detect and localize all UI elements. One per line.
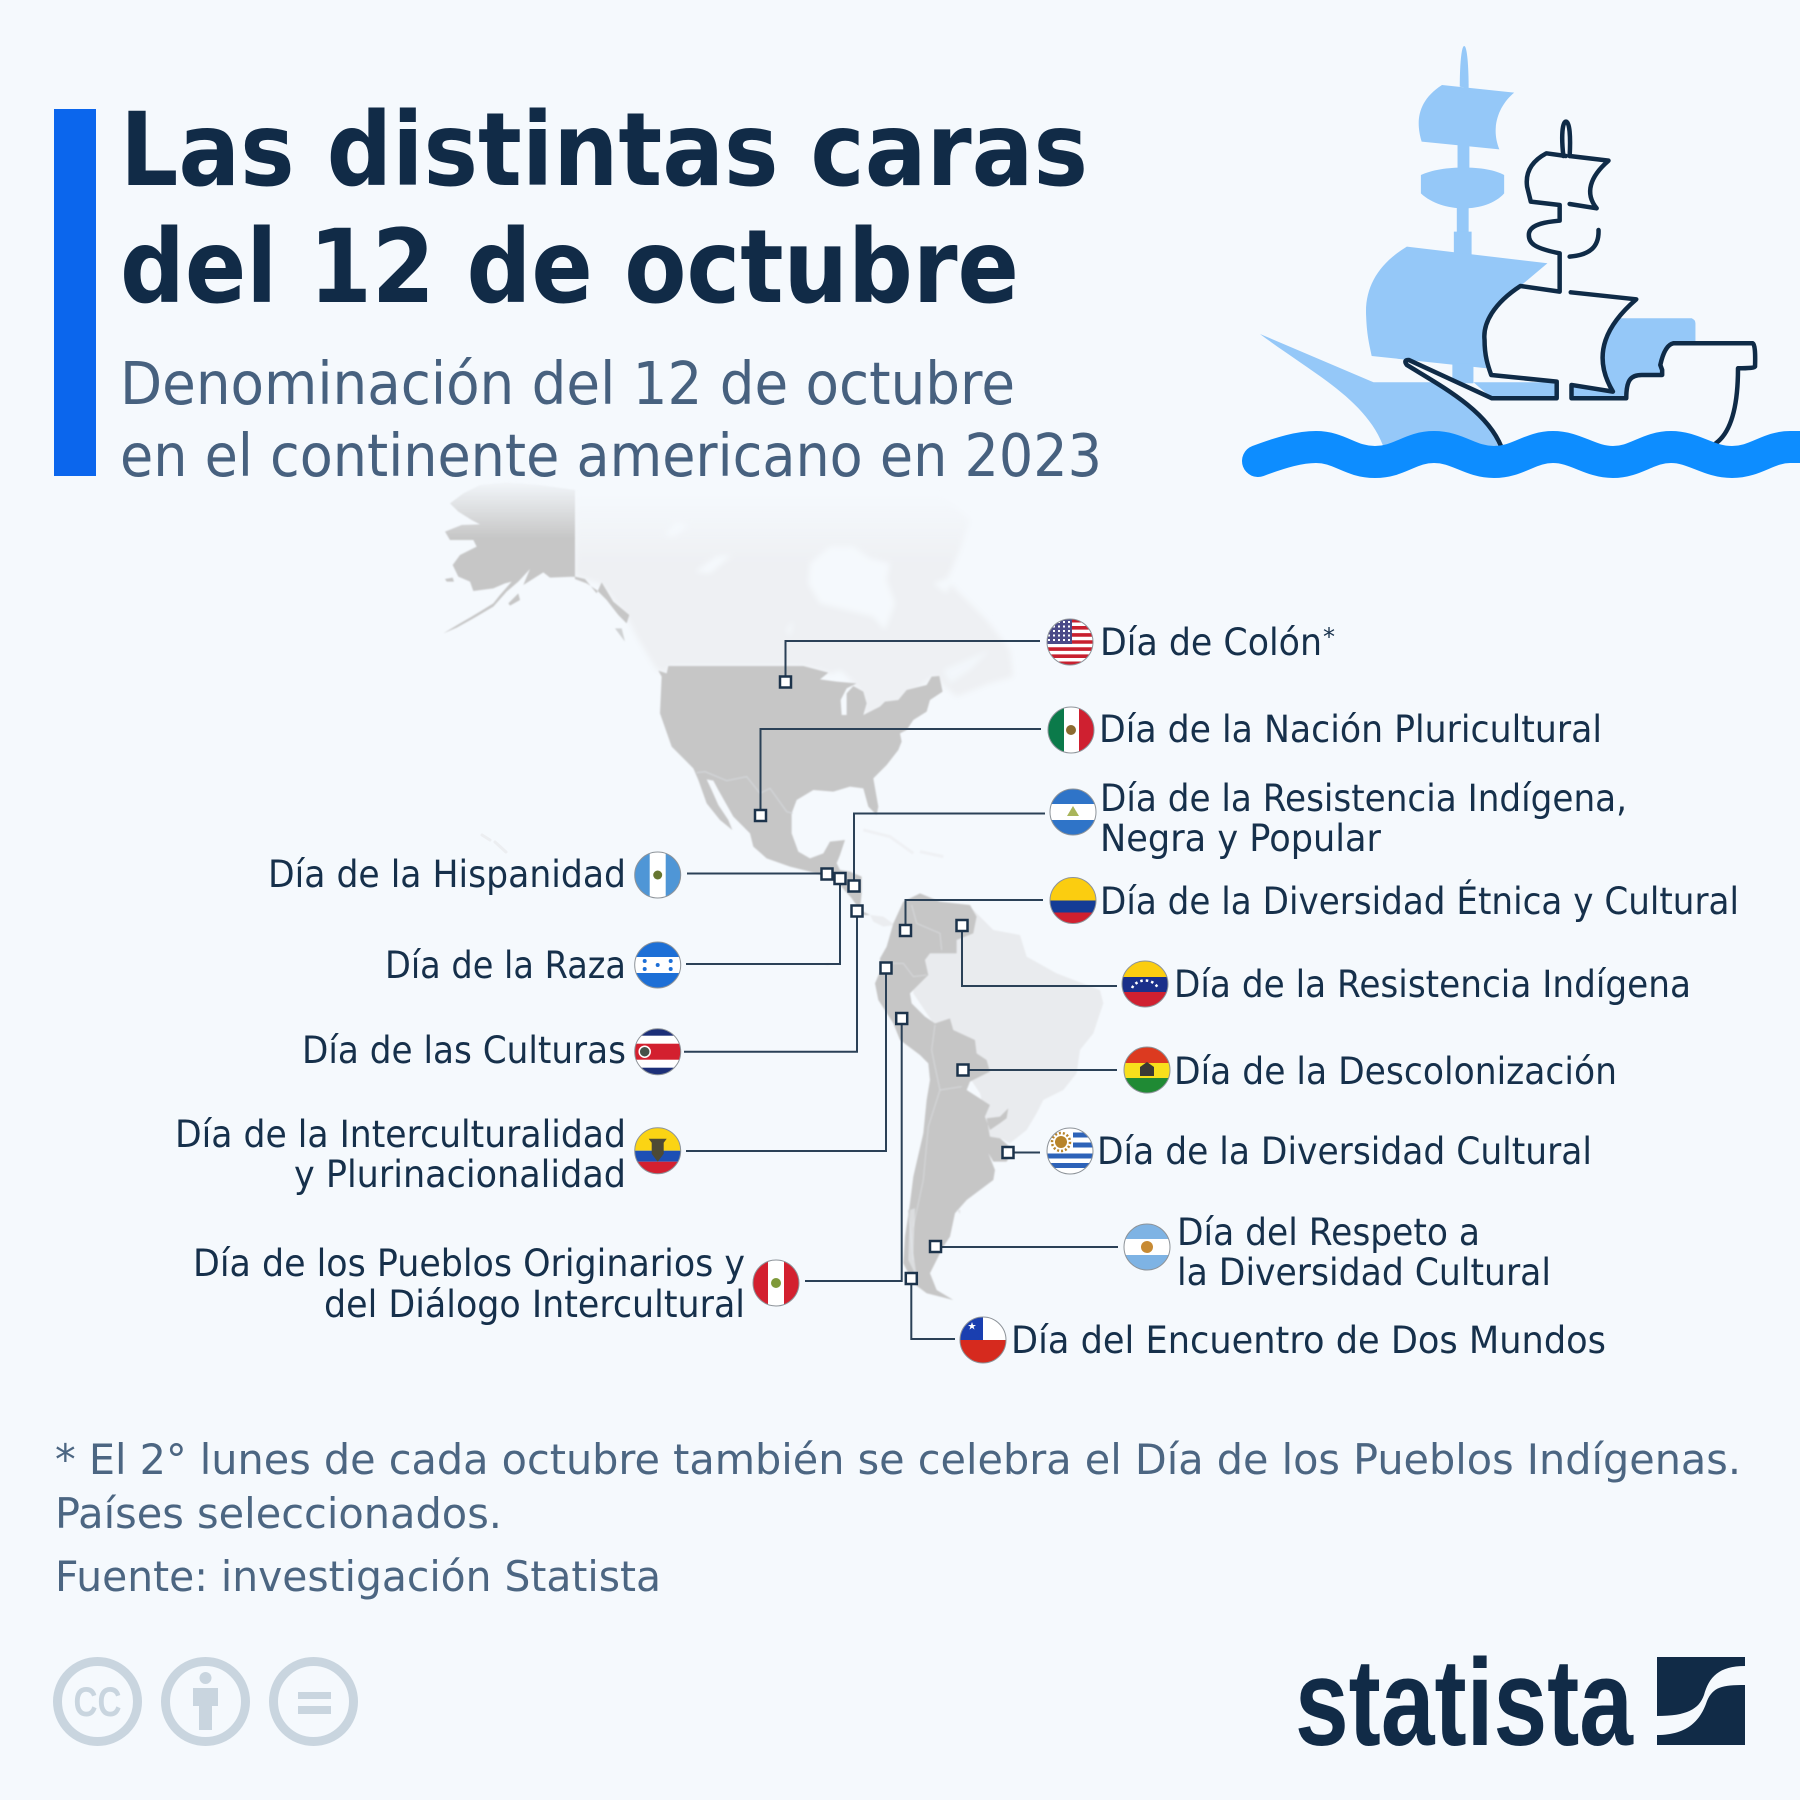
- label: Día de la Interculturalidad y Plurinacionalidad: Día de la Interculturalidad: [175, 1113, 626, 1156]
- callout: Venezuela: [956, 920, 1691, 1007]
- label: Día de la Diversidad Cultural: Día de la Diversidad Cultural: [1097, 1130, 1592, 1173]
- label: Día de la Nación Pluricultural: Día de la Nación Pluricultural: [1099, 708, 1602, 751]
- label: Día del Respeto a la Diversidad Cultural: [1177, 1211, 1551, 1294]
- icon: ship: [1258, 46, 1800, 462]
- callout: Bolivia: [958, 1047, 1617, 1093]
- icon: creative commons licence: [58, 1662, 354, 1742]
- label: Día del Respeto a la Diversidad Cultural: la Diversidad Cultural: [1177, 1251, 1551, 1294]
- subtitle: Denominación del 12 de octubre: [120, 349, 1015, 418]
- subtitle: en el continente americano en 2023: [120, 421, 1102, 490]
- flag: Honduras: [635, 942, 681, 988]
- label: Día de la Resistencia Indígena: Día de la Resistencia Indígena: [1174, 963, 1691, 1006]
- callout: Colombia: [900, 878, 1739, 936]
- map: Alaska: [443, 482, 629, 642]
- label: Día de la Diversidad Étnica y Cultural: Día de la Diversidad Étnica y Cultural: [1100, 879, 1739, 923]
- map: Hawaii: [482, 835, 506, 852]
- title: del 12 de octubre: [120, 208, 1019, 327]
- title: [120, 91, 1088, 327]
- flag: Chile: [960, 1317, 1006, 1363]
- label: Día de los Pueblos Originarios y del Diálogo Intercultural: Día de los Pueblos Originarios y: [193, 1242, 745, 1285]
- callout: United States: [780, 619, 1335, 688]
- callout: Guatemala: [268, 852, 832, 898]
- callout: Uruguay: [1002, 1128, 1592, 1174]
- callout: Argentina: [928, 1215, 1548, 1286]
- label: Día de las Culturas: Día de las Culturas: [302, 1029, 626, 1072]
- flag: Peru: [753, 1260, 799, 1306]
- callout: Chile: [906, 1273, 1606, 1363]
- flag: Uruguay: [1047, 1128, 1093, 1174]
- source: Fuente: investigación Statista: [55, 1552, 661, 1601]
- label: Día de la Hispanidad: Día de la Hispanidad: [268, 853, 626, 896]
- accent bar: [54, 109, 96, 476]
- map of the Americas: [443, 482, 1103, 1300]
- label: Día del Encuentro de Dos Mundos: Día del Encuentro de Dos Mundos: [1011, 1319, 1606, 1362]
- map: South America: [875, 893, 1103, 1300]
- flag: United States: [1047, 619, 1093, 665]
- callout: Ecuador: [175, 962, 892, 1196]
- label: Día de Colón: *: [1323, 623, 1335, 651]
- flag: Ecuador: [635, 1128, 681, 1174]
- footnote: [55, 1435, 1741, 1538]
- label: Día de la Descolonización: Día de la Descolonización: [1174, 1050, 1617, 1093]
- label: Día del Respeto a la Diversidad Cultural: Día del Respeto a: [1177, 1211, 1480, 1254]
- title: Las distintas caras: [120, 91, 1088, 210]
- flag: Nicaragua: [1050, 789, 1096, 835]
- label: Día de los Pueblos Originarios y del Diálogo Intercultural: del Diálogo Intercultural: [324, 1283, 745, 1326]
- flag: Guatemala: [635, 852, 681, 898]
- footnote: * El 2° lunes de cada octubre también se celebra el Día de los Pueblos Indígenas.: [55, 1435, 1741, 1484]
- label: Día de Colón: Día de Colón: [1100, 621, 1322, 664]
- flag: Costa Rica: [635, 1029, 681, 1075]
- flag: Venezuela: [1122, 961, 1168, 1007]
- flag: Mexico: [1048, 707, 1094, 753]
- flag: Argentina: [1124, 1224, 1170, 1270]
- label: Día de la Interculturalidad y Plurinacionalidad: [175, 1113, 626, 1196]
- label: Día de los Pueblos Originarios y del Diálogo Intercultural: [193, 1242, 745, 1326]
- label: Día de la Resistencia Indígena, Negra y Popular: [1100, 777, 1627, 860]
- label: Día de la Resistencia Indígena, Negra y Popular: Negra y Popular: [1100, 817, 1382, 860]
- callout: Mexico: [755, 707, 1602, 821]
- footnote: Países seleccionados.: [55, 1489, 502, 1538]
- label: Día de la Resistencia Indígena, Negra y Popular: Día de la Resistencia Indígena,: [1100, 777, 1627, 820]
- icon: creative commons licence: CC: [74, 1678, 122, 1725]
- label: Día de la Interculturalidad y Plurinacionalidad: y Plurinacionalidad: [294, 1153, 626, 1196]
- flag: Colombia: [1050, 878, 1096, 924]
- flag: Bolivia: [1124, 1047, 1170, 1093]
- map: Canada: [575, 490, 1013, 715]
- callout: Peru: [193, 1013, 907, 1326]
- label: Día de la Raza: Día de la Raza: [385, 944, 626, 987]
- callout: Costa Rica: [302, 906, 862, 1075]
- subtitle: [120, 349, 1102, 490]
- callout: Honduras: [385, 873, 846, 988]
- logo: Statista: statista: [1295, 1635, 1634, 1772]
- map: United States, Mexico and Central America: [658, 666, 943, 966]
- callout: Nicaragua: [848, 777, 1627, 892]
